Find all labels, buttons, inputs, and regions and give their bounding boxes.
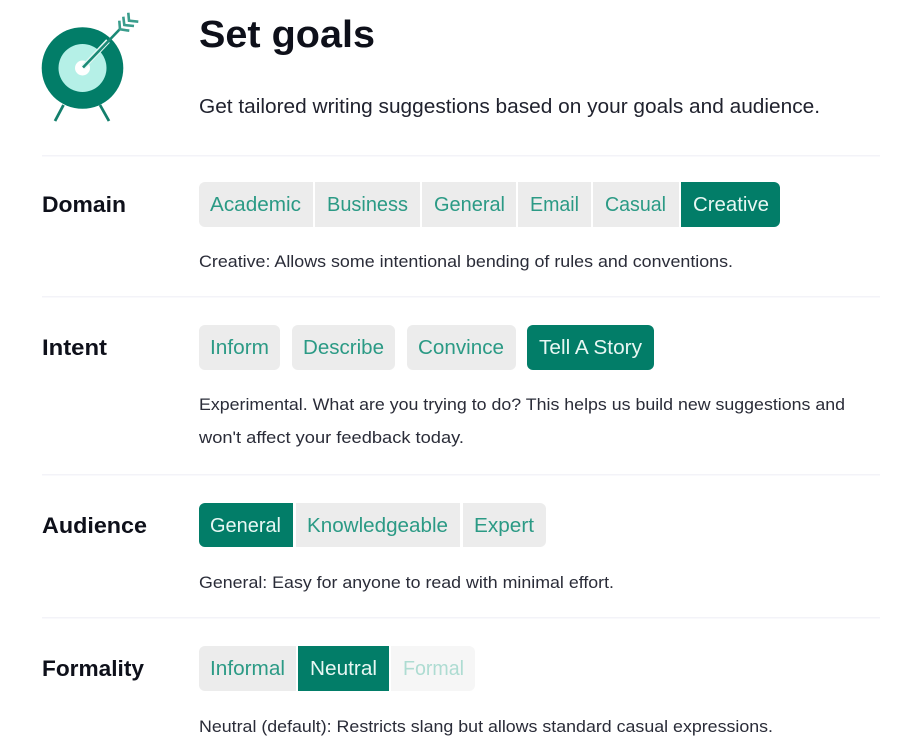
button group: intent: Convince — [418, 336, 504, 359]
button group: audience: Knowledgeable — [307, 514, 448, 537]
panel: domain — [42, 182, 780, 271]
description: domain: Creative: Allows some intentional bending of rules and conventions. — [199, 253, 733, 271]
panel: audience — [42, 503, 614, 592]
button group: formality: Neutral — [310, 657, 377, 680]
heading: intent: Intent — [42, 335, 108, 360]
button group: domain: Casual — [605, 193, 666, 216]
heading: domain: Domain — [42, 192, 126, 217]
button group: intent: Inform — [210, 336, 269, 359]
button group: domain: Academic — [210, 193, 301, 216]
panel: formality — [42, 646, 773, 736]
description: formality: Neutral (default): Restricts slang but allows standard casual expressions. — [199, 718, 773, 736]
button group: formality — [199, 646, 475, 691]
panel: intent — [42, 325, 845, 447]
button group: domain: Business — [327, 193, 408, 216]
description: intent — [198, 396, 845, 447]
button group: intent: Describe — [303, 336, 384, 359]
subtitle: Get tailored writing suggestions based on your goals and audience. — [199, 96, 820, 118]
description: intent: Experimental. What are you trying to do? This helps us build new suggestions and — [199, 396, 845, 414]
button group: formality: Informal — [210, 657, 285, 680]
title: Set goals — [199, 14, 375, 56]
button group: intent — [199, 325, 654, 370]
button group: domain: Creative — [693, 193, 769, 216]
description: intent: won't affect your feedback today. — [198, 429, 464, 447]
button group: domain: Email — [530, 193, 579, 216]
button group: domain: General — [434, 193, 505, 216]
description: audience: General: Easy for anyone to read with minimal effort. — [199, 574, 614, 592]
button group: audience — [199, 503, 546, 547]
heading: audience: Audience — [42, 513, 147, 538]
button group: intent: Tell A Story — [539, 336, 643, 359]
icon: target with arrow — [42, 13, 138, 121]
button group: domain — [199, 182, 780, 227]
button group: audience: General — [210, 514, 281, 537]
heading: formality: Formality — [42, 656, 145, 681]
button group: audience: Expert — [474, 514, 534, 537]
button group: formality: Formal — [403, 657, 464, 680]
